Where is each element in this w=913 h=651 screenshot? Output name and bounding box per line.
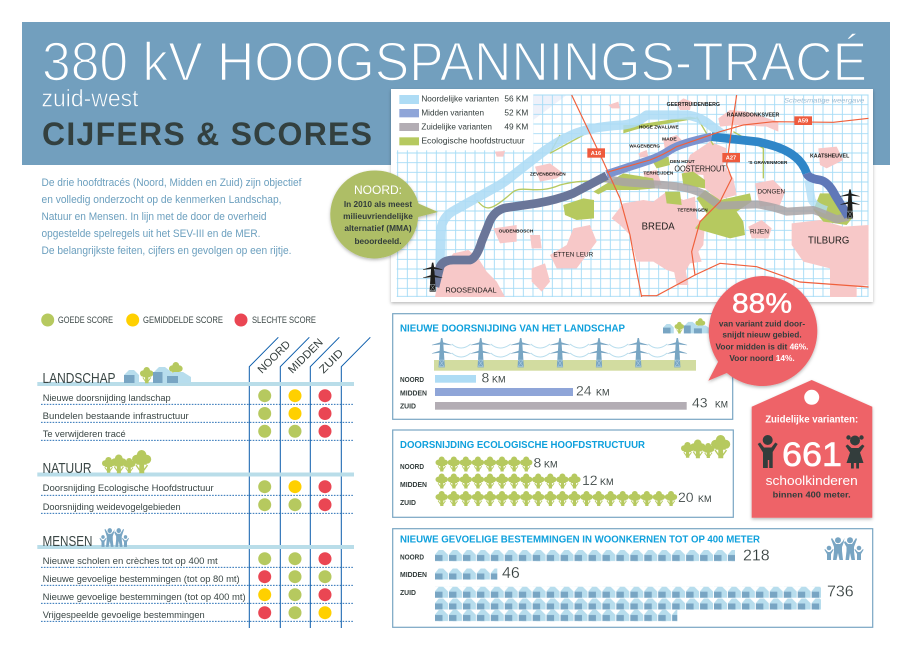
heading: cijfers en scores: CIJFERS & SCORES: [42, 116, 372, 152]
road signs: [587, 116, 812, 162]
tag: schoolkinderen: binnen 400 meter.: [773, 490, 851, 500]
icon: pylon Tilburg: [840, 189, 860, 218]
intro text: en volledig onderzocht op de kenmerken Landschap,: [42, 194, 282, 206]
column headings: ZUID: [317, 347, 346, 376]
panel: ecologische hoofdstructuur: 8: [534, 455, 542, 471]
roads: [572, 95, 869, 297]
tag: schoolkinderen: Zuidelijke varianten:: [765, 415, 858, 426]
callout: noord: beoordeeld.: [354, 236, 402, 246]
column headings: MIDDEN: [286, 336, 326, 376]
callout: 88 procent: van variant zuid door-: [719, 318, 805, 328]
section: mensen: Nieuwe scholen en crèches tot op 400 mt: [43, 555, 218, 566]
bar chart: km landschap: KM: [596, 388, 610, 398]
tree row: noord: [436, 456, 532, 472]
icon: boy: [758, 435, 778, 468]
bar chart: km landschap: KM: [492, 375, 506, 385]
pictogram: houses noord: [435, 550, 735, 561]
intro text: De drie hoofdtracés (Noord, Midden en Zuid) zijn objectief: [42, 177, 302, 189]
bar chart: km landschap: 24: [576, 383, 592, 399]
panel: gevoelige bestemmingen: NOORD: [400, 552, 425, 561]
pale band: [533, 95, 567, 120]
place names: TETERINGEN: [677, 208, 708, 214]
panel: ecologische hoofdstructuur: 20: [678, 489, 694, 505]
section: mensen: Nieuwe gevoelige bestemmingen (tot op 80 mt): [43, 573, 240, 584]
place names: 'S GRAVENMOER: [748, 160, 788, 166]
section: mensen: Vrijgespeelde gevoelige bestemmingen: [43, 609, 205, 620]
map legend: 56 KM: [504, 94, 528, 104]
ecological structure: [563, 117, 853, 238]
icon: girl: [846, 435, 864, 468]
icon: trees: [102, 450, 151, 473]
section: natuur: Doorsnijding weidevogelgebieden: [43, 501, 181, 512]
place names: KAATSHEUVEL: [810, 153, 850, 159]
section: landschap: Bundelen bestaande infrastructuur: [43, 410, 189, 421]
column lines: [249, 337, 370, 628]
section: mensen: [42, 528, 332, 620]
score legend: GEMIDDELDE SCORE: [143, 315, 223, 325]
road signs: A27: [726, 156, 736, 162]
bar chart: km landschap: [400, 370, 728, 410]
place names: GEERTRUIDENBERG: [667, 102, 721, 108]
panel: ecologische hoofdstructuur: 12: [582, 472, 598, 488]
bar chart: km landschap: MIDDEN: [400, 388, 427, 398]
panel: gevoelige bestemmingen: NIEUWE GEVOELIGE BESTEMMINGEN IN WOONKERNEN TOT OP 400 METER: [400, 535, 761, 546]
icon: family: [100, 528, 129, 547]
map legend: [393, 89, 533, 150]
section: natuur: NATUUR: [42, 461, 92, 477]
place names: MADE: [662, 137, 677, 143]
panel: ecologische hoofdstructuur: KM: [698, 494, 712, 504]
header band: [22, 22, 890, 165]
bar chart: km landschap: KM: [715, 399, 728, 409]
place names: TERHEIJDEN: [643, 171, 674, 177]
section: landschap: Te verwijderen tracé: [43, 428, 126, 439]
map legend: 49 KM: [504, 122, 528, 132]
panel: ecologische hoofdstructuur: MIDDEN: [400, 480, 427, 489]
score legend: GOEDE SCORE: [58, 315, 113, 325]
place names: RAAMSDONKSVEER: [727, 113, 779, 119]
place names: RIJEN: [750, 229, 769, 235]
panel: doorsnijding landschap: NIEUWE DOORSNIJDING VAN HET LANDSCHAP: [400, 324, 625, 335]
panel: ecologische hoofdstructuur: KM: [600, 477, 614, 487]
panel: ecologische hoofdstructuur: KM: [544, 460, 558, 470]
road signs: A16: [591, 151, 601, 157]
tag: schoolkinderen: [752, 380, 872, 518]
intro text: opgestelde spelregels uit het SEV-III en de MER.: [42, 228, 260, 240]
callout: noord: milieuvriendelijke: [343, 211, 413, 221]
panel: doorsnijding landschap: [393, 314, 733, 419]
tag: schoolkinderen: 661: [782, 436, 842, 474]
panel: gevoelige bestemmingen: ZUID: [400, 588, 417, 597]
intro text: [42, 177, 302, 257]
pictogram: houses midden: [435, 568, 497, 580]
place names: OUDENBOSCH: [499, 229, 534, 235]
map legend: 52 KM: [504, 108, 528, 118]
callout: 88 procent: Voor midden is dit 46%.: [716, 342, 808, 352]
tree row: midden: [436, 474, 581, 488]
map legend: Midden varianten: [421, 108, 484, 118]
column headings: [256, 336, 346, 376]
bar chart: km landschap: ZUID: [400, 402, 417, 410]
callout: 88 procent: Voor noord 14%.: [729, 353, 795, 363]
section: mensen: Nieuwe gevoelige bestemmingen (tot op 400 mt): [43, 591, 246, 602]
intro text: Natuur en Mensen. In lijn met de door de overheid: [42, 211, 266, 223]
map legend: Ecologische hoofdstructuur: [421, 136, 525, 146]
callout: noord: alternatief (MMA): [344, 223, 412, 233]
pictogram: houses zuid: [435, 587, 821, 621]
panel: gevoelige bestemmingen: 46: [502, 565, 520, 582]
panel: gevoelige bestemmingen: 218: [743, 548, 770, 565]
place names: BREDA: [642, 222, 675, 233]
panel: ecologische hoofdstructuur: DOORSNIJDING ECOLOGISCHE HOOFDSTRUCTUUR: [400, 440, 646, 451]
section: landschap: Nieuwe doorsnijding landschap: [43, 392, 171, 403]
panel: map: [391, 89, 873, 302]
panel: ecologische hoofdstructuur: [393, 430, 733, 517]
callout: noord: NOORD:: [354, 183, 402, 197]
place names: TILBURG: [808, 235, 849, 246]
place names: ROOSENDAAL: [445, 287, 497, 294]
place names: ETTEN LEUR: [553, 252, 594, 259]
section: landschap: LANDSCHAP: [42, 371, 116, 387]
score legend: SLECHTE SCORE: [252, 315, 316, 325]
callout: 88 procent: [708, 276, 817, 386]
icon: houses and trees: [124, 362, 191, 383]
panel: ecologische hoofdstructuur: ZUID: [400, 498, 417, 507]
tag: schoolkinderen: schoolkinderen: [766, 473, 858, 488]
panel: gevoelige bestemmingen: [393, 529, 873, 627]
section: mensen: MENSEN: [42, 534, 92, 550]
map grid: [397, 95, 869, 297]
icon: trees: [681, 435, 730, 458]
tree row: zuid: [436, 491, 677, 506]
road signs: A59: [798, 119, 808, 125]
icon: family: [824, 537, 864, 560]
pylon row: [432, 338, 696, 371]
panel: gevoelige bestemmingen: MIDDEN: [400, 570, 427, 579]
title: 380 kV HOOGSPANNINGS-TRACÉ: [42, 30, 867, 92]
place names: HOGE ZWALUWE: [639, 125, 679, 131]
bar chart: km landschap: NOORD: [400, 375, 425, 384]
score legend: [41, 314, 316, 326]
callout: noord: In 2010 als meest: [344, 199, 412, 209]
column headings: NOORD: [256, 339, 293, 376]
callout: noord: [330, 170, 438, 258]
map note: Schetsmatige weergave: [784, 97, 865, 104]
callout: 88 procent: 88%: [732, 288, 792, 319]
subtitle: zuid-west: [42, 86, 139, 112]
place names: ZEVENBERGEN: [530, 172, 566, 178]
routes: [435, 115, 848, 287]
place names: DEN HOUT: [670, 159, 695, 165]
map legend: Zuidelijke varianten: [421, 122, 492, 132]
icon: houses and trees: [663, 318, 711, 334]
bar chart: km landschap: 43: [692, 394, 708, 410]
place names: WAGENBERG: [629, 144, 660, 150]
section: landschap: [42, 362, 332, 439]
place names: [445, 102, 850, 294]
place names: OOSTERHOUT: [674, 165, 726, 174]
callout: 88 procent: snijdt nieuw gebied.: [722, 330, 802, 340]
section: natuur: Doorsnijding Ecologische Hoofdstructuur: [43, 482, 214, 493]
panel: ecologische hoofdstructuur: NOORD: [400, 462, 425, 471]
panel: gevoelige bestemmingen: 736: [827, 584, 854, 601]
icon: pylon Roosendaal: [423, 263, 442, 292]
section: natuur: [42, 450, 332, 512]
place names: DONGEN: [758, 189, 785, 195]
intro text: De belangrijkste feiten, cijfers en gevolgen op een rijtje.: [42, 245, 292, 257]
urban areas: [435, 98, 869, 297]
section bars: [37, 384, 354, 547]
bar chart: km landschap: 8: [482, 370, 490, 386]
score table: [37, 336, 370, 628]
map legend: Noordelijke varianten: [421, 94, 499, 104]
